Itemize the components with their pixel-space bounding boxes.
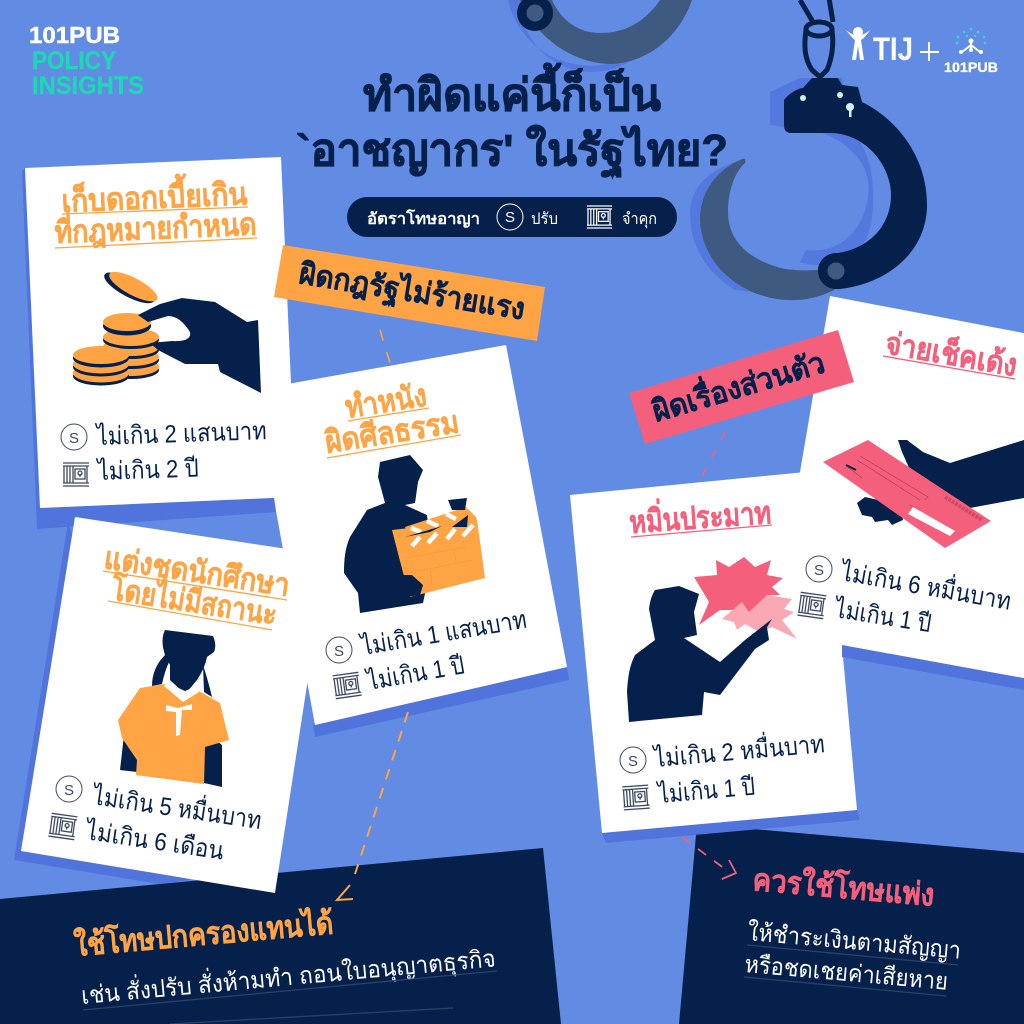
text: civil penalty detail line 1: ให้ชำระเงินตามสัญญา — [746, 918, 962, 965]
icon: girl in uniform — [118, 630, 229, 787]
panel: immoral film card: ผิดศีลธรรม — [323, 404, 461, 460]
heading: defamation: หมิ่นประมาท — [628, 490, 772, 540]
logo: TIJ + 101PUB: TIJ — [873, 31, 913, 67]
panel: defamation card: ไม่เกิน 1 ปี — [655, 772, 756, 809]
penalty: fine: S — [64, 782, 74, 799]
heading: civil penalty: ควรใช้โทษแพ่ง — [751, 861, 936, 913]
panel: student uniform card — [14, 517, 327, 893]
legend pill: จำคุก — [622, 211, 657, 229]
legend pill: ปรับ — [531, 211, 558, 228]
penalty: fine — [61, 424, 87, 450]
panel: civil penalty dark panel — [679, 824, 1024, 1024]
panel: immoral film card: ไม่เกิน 1 แสนบาท — [357, 605, 529, 661]
label: minor state offence: ผิดกฎรัฐไม่ร้ายแรง — [296, 255, 528, 329]
penalty: fine: S — [628, 753, 638, 770]
penalty: jail — [797, 592, 826, 619]
panel: immoral film card — [254, 345, 569, 737]
icon: TIJ person — [846, 27, 870, 60]
panel: bad cheque card: ไม่เกิน 1 ปี — [831, 594, 933, 638]
icon: hand with cheque — [823, 440, 1024, 548]
icon: man with clapperboard — [344, 455, 485, 613]
arrow: pink to civil panel — [682, 837, 736, 879]
legend pill — [347, 197, 677, 237]
legend pill: อัตราโทษอาญา — [367, 208, 480, 229]
icon: jail — [587, 206, 612, 228]
arrow: orange to administrative panel — [337, 712, 408, 900]
icon: pointing man with burst — [627, 557, 797, 722]
penalty: fine: S — [334, 643, 344, 660]
panel: defamation card — [570, 470, 860, 843]
penalty: fine — [806, 556, 832, 582]
penalty: jail — [48, 813, 77, 840]
logo: 101PUB Policy Insights: INSIGHTS — [32, 72, 144, 100]
heading: administrative penalty: ใช้โทษปกครองแทนได้ — [72, 904, 335, 963]
logo: TIJ + 101PUB — [846, 27, 998, 75]
label: minor state offence — [274, 245, 545, 341]
title: `อาชญากร' ในรัฐไทย? — [296, 124, 728, 178]
logo: 101PUB Policy Insights: POLICY — [32, 47, 116, 75]
penalty: jail — [622, 785, 650, 810]
icon: coins and hand — [73, 265, 261, 393]
icon: fine — [497, 204, 523, 230]
icon: fine: S — [505, 209, 515, 226]
panel: usury card: ไม่เกิน 2 แสนบาท — [94, 416, 267, 451]
panel: student uniform card: ไม่เกิน 6 เดือน — [82, 816, 226, 865]
panel: student uniform card: ไม่เกิน 5 หมื่นบาท — [89, 778, 264, 835]
heading: immoral film: ทำหนัง — [343, 378, 429, 425]
heading: usury: เก็บดอกเบี้ยเกิน — [61, 170, 248, 219]
panel: usury card: ที่กฎหมายกำหนด — [54, 202, 257, 250]
text: civil penalty detail line 2: หรือชดเชยค่าเสียหาย — [743, 951, 949, 996]
panel: student uniform card: โดยไม่มีสถานะ — [108, 570, 279, 632]
title — [296, 62, 728, 178]
title: ทำผิดแค่นี้ก็เป็น — [363, 62, 661, 120]
heading: student uniform: แต่งชุดนักศึกษา — [102, 540, 292, 605]
logo: 101PUB Policy Insights: 101PUB — [29, 22, 120, 48]
panel: defamation card: ไม่เกิน 2 หมื่นบาท — [651, 726, 826, 773]
icon: network sparkle — [956, 28, 986, 54]
logo: 101PUB Policy Insights — [29, 22, 144, 100]
icon: hanging handcuff with chain — [690, 0, 927, 300]
label: personal offence — [629, 330, 854, 444]
label: personal offence: ผิดเรื่องส่วนตัว — [647, 341, 829, 429]
panel: bad cheque card — [796, 296, 1024, 690]
panel: administrative penalty dark panel — [0, 848, 561, 1024]
logo: TIJ + 101PUB: 101PUB — [944, 59, 998, 75]
panel: usury card: ไม่เกิน 2 ปี — [95, 453, 199, 486]
panel: usury card — [22, 157, 296, 529]
icon: top handcuff — [508, 0, 692, 72]
text: administrative examples: เช่น สั่งปรับ สั่งห้ามทำ ถอนใบอนุญาตธุรกิจ — [80, 941, 497, 1011]
penalty: jail — [333, 672, 362, 699]
icon: chain links — [800, 0, 833, 77]
arrow: pink label to defamation card — [700, 432, 725, 480]
penalty: fine — [56, 776, 82, 802]
panel: immoral film card: ไม่เกิน 1 ปี — [363, 650, 467, 696]
penalty: fine: S — [69, 430, 79, 447]
arrow: orange label to film card — [380, 330, 390, 363]
penalty: jail — [63, 463, 89, 486]
penalty: fine — [326, 637, 352, 663]
penalty: fine: S — [814, 562, 824, 579]
penalty: fine — [620, 747, 646, 773]
